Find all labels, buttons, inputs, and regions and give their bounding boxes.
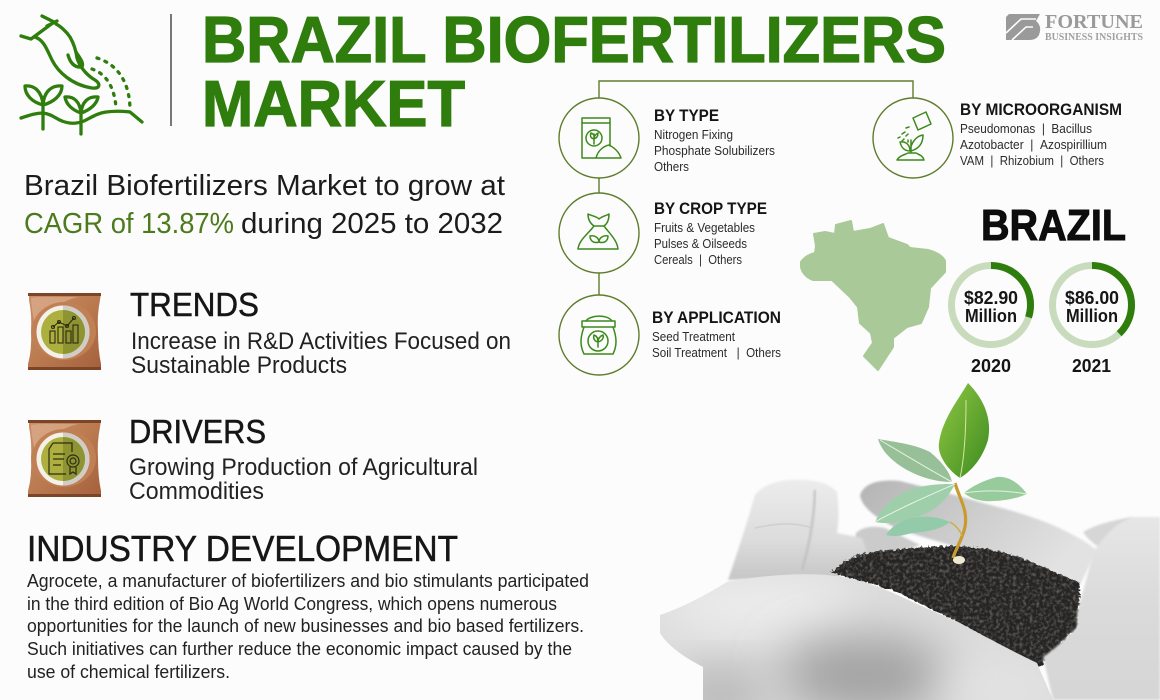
segment: by crop type: BY CROP TYPE [654, 200, 767, 218]
photo: hands holding soil and seedling [660, 383, 1160, 700]
trends text: Increase in R&D Activities Focused on [131, 328, 511, 355]
segment: by crop type [559, 193, 767, 273]
back finger [860, 481, 1097, 585]
trends text: TRENDS [130, 286, 259, 323]
donut: 2020: 2020 [971, 355, 1011, 376]
title: MARKET [202, 67, 465, 140]
title [202, 3, 946, 140]
industry development: Agrocete, a manufacturer of biofertilizers and bio stimulants participated [27, 571, 589, 591]
segment: by crop type: Cereals | Others [654, 252, 742, 267]
headline growth statement: Brazil Biofertilizers Market to grow at [24, 170, 505, 202]
icon: trends bag [28, 293, 101, 370]
segment: by type [559, 98, 775, 178]
front fingers [728, 480, 868, 580]
segment: by type: Others [654, 159, 689, 174]
segment: by microorganism [873, 98, 1122, 178]
title: BRAZIL BIOFERTILIZERS [202, 3, 946, 76]
drivers text: DRIVERS [129, 413, 266, 450]
leaf: top [939, 383, 989, 478]
segment: by microorganism: BY MICROORGANISM [960, 101, 1122, 119]
segment: by application: BY APPLICATION [652, 309, 781, 327]
brand logo: BUSINESS INSIGHTS [1045, 32, 1143, 43]
segment: by application: Soil Treatment | Others [652, 345, 781, 360]
donut: 2021 [1052, 266, 1132, 376]
headline growth statement: CAGR of 13.87% [24, 208, 234, 240]
map of Brazil [801, 221, 945, 370]
industry development: INDUSTRY DEVELOPMENT [27, 528, 458, 569]
connector lines [599, 81, 913, 295]
segment: by application: Seed Treatment [652, 329, 735, 344]
leaf: upper left [878, 439, 952, 482]
drivers text: Growing Production of Agricultural [129, 454, 478, 481]
donut: 2020: Million [965, 305, 1017, 326]
trends text [130, 286, 511, 379]
segment: by application [559, 295, 781, 375]
segment: by type: Nitrogen Fixing [654, 127, 733, 142]
trends text: Sustainable Products [131, 352, 347, 379]
segment: by crop type: Pulses & Oilseeds [654, 236, 747, 251]
industry development [27, 528, 589, 682]
segment: by microorganism: VAM | Rhizobium | Others [960, 153, 1104, 168]
palm [660, 574, 1060, 700]
seedling stem [953, 483, 966, 558]
donut: 2021: $86.00 [1065, 287, 1119, 308]
industry development: in the third edition of Bio Ag World Congress, which opens numerous [27, 594, 557, 614]
segment: by type: Phosphate Solubilizers [654, 143, 775, 158]
icon: drivers bag [28, 420, 101, 497]
divider [170, 14, 172, 126]
donut: 2020 [952, 266, 1030, 376]
donut: 2020: $82.90 [964, 287, 1018, 308]
leaf: large left [875, 484, 955, 523]
logo icon: hand planting seedlings [21, 16, 142, 134]
brand logo: FORTUNE [1045, 11, 1143, 33]
donut: 2021: Million [1066, 305, 1118, 326]
brand logo [1006, 11, 1143, 43]
soil [830, 546, 1080, 667]
far finger [1083, 517, 1133, 548]
industry development: Such initiatives can further reduce the economic impact caused by the [27, 639, 572, 659]
segment: by microorganism: Azotobacter | Azospirillium [960, 137, 1107, 152]
right hand [1043, 517, 1160, 700]
segment: by microorganism: Pseudomonas | Bacillus [960, 121, 1092, 136]
segment: by crop type: Fruits & Vegetables [654, 220, 755, 235]
drivers text: Commodities [129, 478, 264, 505]
headline growth statement [24, 170, 505, 240]
small finger [850, 527, 920, 570]
headline growth statement: during 2025 to 2032 [241, 208, 503, 240]
industry development: use of chemical fertilizers. [27, 662, 230, 682]
donut: 2021: 2021 [1072, 355, 1111, 376]
country heading: BRAZIL [981, 201, 1126, 250]
drivers text [129, 413, 478, 505]
leaf: right [964, 477, 1027, 501]
industry development: opportunities for the launch of new businesses and bio based fertilizers. [27, 616, 584, 636]
segment: by type: BY TYPE [654, 107, 719, 125]
leaf: lower [886, 517, 950, 536]
